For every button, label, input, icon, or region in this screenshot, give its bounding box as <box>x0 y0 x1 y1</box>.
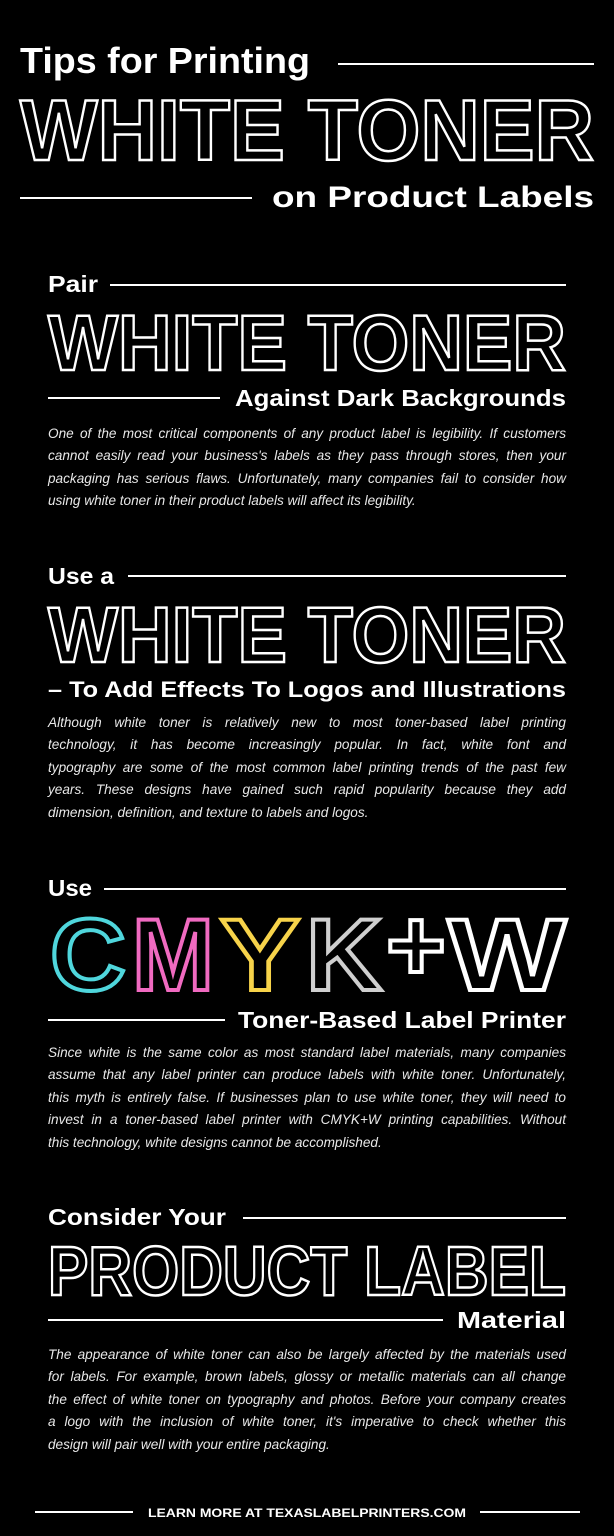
paragraph 1: packaging has serious flaws. Unfortunately, many companies fail to consider how <box>48 471 566 486</box>
paragraph 4: design will pair well with your entire packaging. <box>48 1437 330 1452</box>
heading: section 2: – To Add Effects To Logos and Illustrations <box>48 677 566 702</box>
title: WHITE TONER <box>20 83 594 179</box>
footer: LEARN MORE AT TEXASLABELPRINTERS.COM <box>148 1506 466 1520</box>
title <box>20 40 594 214</box>
heading: section 1 <box>48 271 566 411</box>
heading: section 1: Against Dark Backgrounds <box>235 385 566 411</box>
paragraph 2: years. These designs have gained such rapid popularity because they add <box>48 782 566 797</box>
paragraph 2: dimension, definition, and texture to labels and logos. <box>48 805 368 820</box>
paragraph 3: this myth is entirely false. If businesses plan to use white toner, they will need to <box>48 1090 566 1105</box>
paragraph 1 <box>48 426 567 508</box>
heading: section 4: Material <box>457 1307 566 1333</box>
paragraph 4: a logo with the inclusion of white toner, it's imperative to check whether this <box>48 1414 566 1429</box>
paragraph 1: One of the most critical components of any product label is legibility. If customers <box>48 426 566 441</box>
title: on Product Labels <box>272 181 594 214</box>
heading: section 3 CMYK+W: + <box>386 888 446 1002</box>
heading: section 3 CMYK+W <box>48 875 567 1033</box>
paragraph 3: this technology, white designs cannot be accomplished. <box>48 1135 382 1150</box>
heading: section 2 <box>48 563 566 702</box>
paragraph 2: typography are some of the most common label printing trends of the past few <box>48 760 566 775</box>
paragraph 2: technology, it has become increasingly popular. In fact, white font and <box>48 737 566 752</box>
heading: section 3 CMYK+W: K <box>306 898 382 1012</box>
paragraph 2: Although white toner is relatively new to most toner-based label printing <box>48 715 566 730</box>
heading: section 2: Use a <box>48 563 114 589</box>
paragraph 3 <box>48 1045 566 1150</box>
heading: section 4: Consider Your <box>48 1204 226 1230</box>
paragraph 4: the effect of white toner on typography and photos. Before your company creates <box>48 1392 566 1407</box>
heading: section 3 CMYK+W: C <box>50 898 126 1012</box>
paragraph 2 <box>47 715 567 820</box>
heading: section 4 <box>48 1204 566 1333</box>
heading: section 3 CMYK+W: Toner-Based Label Printer <box>238 1007 566 1033</box>
paragraph 3: assume that any label printer can produce labels with white toner. Unfortunately, <box>48 1067 566 1082</box>
paragraph 3: Since white is the same color as most standard label materials, many companies <box>48 1045 566 1060</box>
heading: section 1: WHITE TONER <box>48 298 566 387</box>
heading: section 3 CMYK+W: Use <box>48 875 92 901</box>
paragraph 4: for labels. For example, brown labels, glossy or metallic materials can all change <box>48 1369 566 1384</box>
heading: section 1: Pair <box>48 271 98 297</box>
heading: section 3 CMYK+W: W <box>448 898 567 1012</box>
paragraph 4: The appearance of white toner can also be largely affected by the materials used <box>48 1347 566 1362</box>
heading: section 3 CMYK+W: Y <box>220 898 300 1012</box>
heading: section 2: WHITE TONER <box>48 590 566 679</box>
heading: section 3 CMYK+W: M <box>132 898 214 1012</box>
paragraph 1: cannot easily read your business's labels as they pass through stores, then your <box>48 448 566 463</box>
paragraph 1: using white toner in their product labels will affect its legibility. <box>48 493 416 508</box>
paragraph 4 <box>48 1347 566 1452</box>
title: Tips for Printing <box>20 40 310 81</box>
paragraph 3: invest in a toner-based label printer with CMYK+W printing capabilities. Without <box>48 1112 566 1127</box>
